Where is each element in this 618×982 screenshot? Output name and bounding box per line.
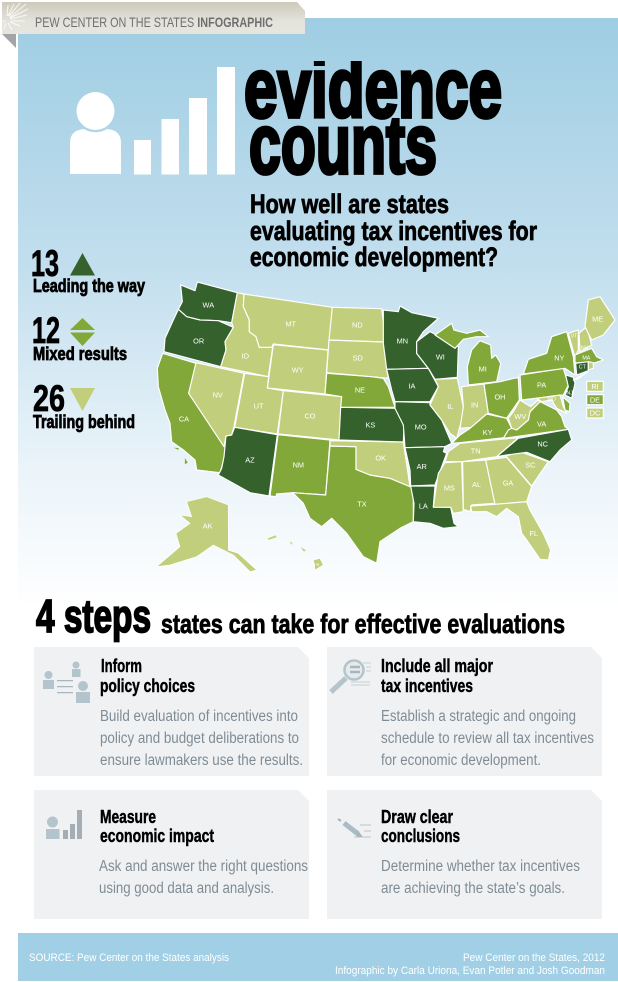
state labels west: UT [254, 402, 264, 411]
eastern states [383, 297, 615, 560]
panel: inform policy choices: Inform [101, 656, 142, 676]
panel: include all major tax incentives: tax incentives [381, 676, 473, 696]
panel: inform policy choices: policy choices [100, 676, 195, 696]
legend: mixed results: Mixed results [33, 344, 127, 364]
panel: measure economic impact: economic impact [100, 826, 214, 846]
state labels west: CA [179, 415, 189, 424]
state labels east: NH [581, 346, 589, 352]
state labels west: ND [352, 321, 363, 330]
panel: inform policy choices: policy and budget deliberations to [100, 730, 299, 747]
state labels east: MO [415, 423, 427, 432]
map: United States by evaluation rating [157, 282, 615, 572]
legend: trailing behind: Trailing behind [33, 412, 135, 432]
footer bar [18, 933, 618, 981]
state labels east: DC [590, 409, 601, 418]
state labels east: SC [525, 461, 536, 470]
state labels west: HI [314, 562, 319, 568]
state labels east: WI [436, 353, 445, 362]
panel: draw clear conclusions: Draw clear [381, 807, 453, 827]
state labels west: AK [203, 522, 213, 531]
panel: draw clear conclusions [327, 790, 602, 919]
state labels west: NE [355, 386, 365, 395]
state labels east: MD [548, 396, 556, 402]
state labels east: OH [494, 393, 505, 402]
panel: measure economic impact [34, 790, 309, 919]
state labels east: FL [529, 529, 538, 538]
state labels east: GA [503, 479, 513, 488]
state labels west: WY [292, 366, 304, 375]
panel: inform policy choices [34, 647, 309, 776]
subtitle question: How well are states [250, 189, 449, 219]
state labels west: WA [203, 301, 214, 310]
state labels east: ME [592, 315, 603, 324]
state labels east: MN [397, 337, 408, 346]
state labels east: AR [417, 462, 427, 471]
legend: leading the way [31, 243, 145, 296]
footer bar: Pew Center on the States, 2012 [463, 952, 605, 964]
panel: draw clear conclusions: are achieving the state’s goals. [381, 880, 565, 897]
state labels east: NJ [566, 390, 573, 396]
panel: draw clear conclusions: conclusions [381, 826, 460, 846]
state labels west: ID [242, 351, 249, 360]
legend: trailing behind [33, 378, 135, 432]
panel: blue gradient background [18, 18, 618, 608]
subtitle question: economic development? [250, 242, 498, 272]
fold triangle [2, 34, 16, 48]
legend: mixed results: 12 [32, 310, 60, 351]
state labels west: NV [213, 391, 223, 400]
panel: inform policy choices: ensure lawmakers use the results. [100, 752, 303, 769]
state labels east: AL [472, 480, 481, 489]
state labels west [179, 301, 386, 568]
state labels east: WV [514, 412, 526, 421]
subtitle question: evaluating tax incentives for [250, 216, 537, 246]
state labels east: TN [471, 447, 481, 456]
panel: include all major tax incentives [327, 647, 602, 776]
state labels east: IL [447, 402, 453, 411]
panel: draw clear conclusions: Determine whether tax incentives [381, 858, 580, 875]
header tab: PEW CENTER ON THE STATES INFOGRAPHIC [35, 14, 273, 30]
state labels east: NC [537, 440, 549, 449]
title: counts [249, 97, 437, 191]
state labels east: LA [419, 502, 428, 511]
state labels west: MT [285, 320, 296, 329]
footer bar: SOURCE: Pew Center on the States analysis [29, 952, 229, 964]
legend: mixed results [32, 310, 127, 364]
state labels west: KS [365, 421, 375, 430]
panel: include all major tax incentives: Include all major [381, 656, 493, 676]
state labels east: DE [590, 395, 600, 404]
panel: include all major tax incentives: for economic development. [381, 752, 541, 769]
state labels east: IN [471, 401, 478, 410]
state labels east: MI [479, 365, 487, 374]
icon: magnifying glass [331, 660, 371, 692]
panel: measure economic impact: using good data and analysis. [99, 880, 274, 897]
icon: person with bars [46, 810, 82, 839]
icon: person with rising bars [70, 67, 235, 174]
state labels east: IA [409, 382, 416, 391]
state labels west: NM [293, 461, 304, 470]
state labels east: MS [444, 484, 455, 493]
title [245, 61, 502, 176]
icon: pencil with lines [338, 819, 371, 837]
legend: leading the way: 13 [31, 243, 59, 284]
state labels west: AZ [245, 456, 255, 465]
panel: inform policy choices: Build evaluation of incentives into [100, 708, 298, 725]
legend: leading the way: Leading the way [33, 276, 145, 296]
legend: trailing behind: 26 [33, 378, 65, 419]
panel: measure economic impact: Measure [100, 807, 156, 827]
state labels east: VT [571, 334, 578, 340]
state labels east: CT [579, 365, 587, 371]
western states [157, 282, 413, 572]
state labels west: TX [357, 500, 367, 509]
state labels east: MA [582, 356, 591, 362]
state labels west: SD [353, 354, 363, 363]
state labels east: KY [483, 428, 493, 437]
state labels east: PA [537, 381, 546, 390]
state labels west: OR [193, 337, 204, 346]
state labels east [397, 315, 603, 538]
state labels east: RI [591, 382, 599, 391]
title: evidence [244, 41, 502, 135]
subtitle question [250, 189, 537, 272]
icon: people with lines [43, 662, 90, 703]
state labels east: VA [537, 420, 546, 429]
section heading: 4 steps [36, 590, 565, 642]
state labels east: NY [554, 354, 565, 363]
section heading: 4 steps: 4 steps [36, 590, 151, 642]
state labels west: CO [304, 412, 316, 421]
panel: measure economic impact: Ask and answer the right questions [99, 858, 308, 875]
state labels west: OK [375, 454, 386, 463]
header tab [2, 2, 305, 34]
panel: include all major tax incentives: Establish a strategic and ongoing [381, 708, 576, 725]
